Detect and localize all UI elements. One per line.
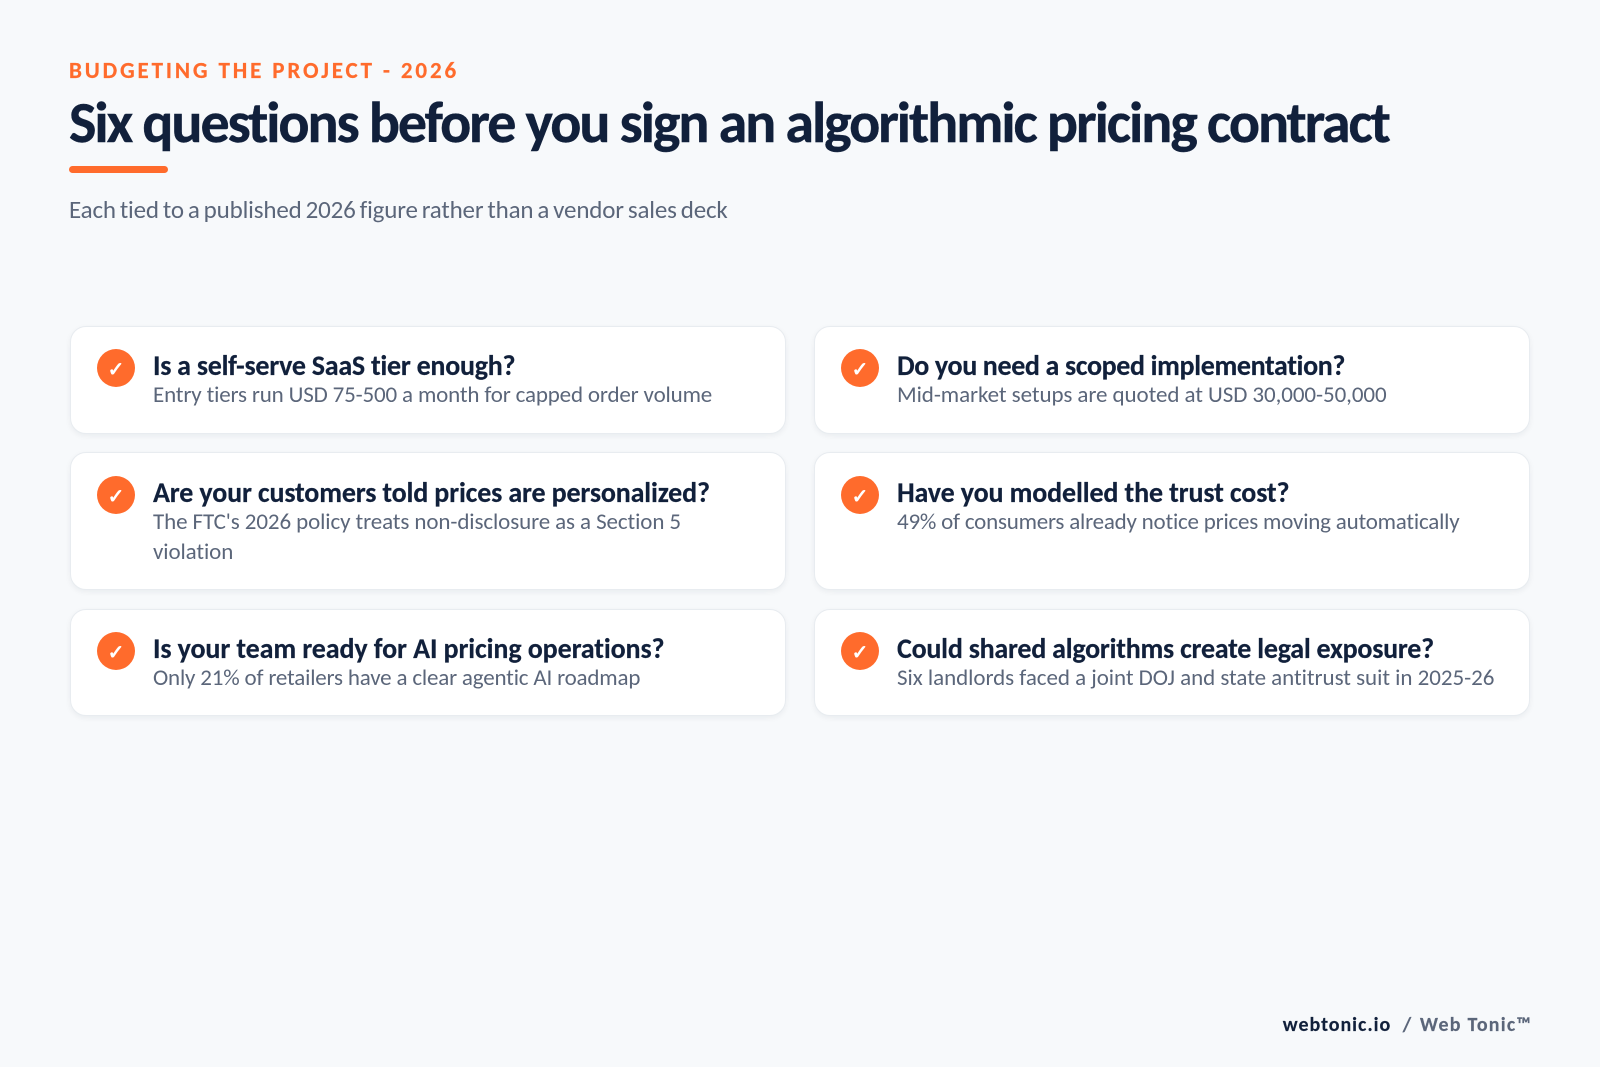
answer text: 49% of consumers already notice prices moving automatically [897,508,1459,536]
icon: check: ✓ [108,357,124,381]
question heading: Do you need a scoped implementation? [897,348,1345,383]
panel: self-serve SaaS tier [70,326,786,434]
icon: check [97,476,135,514]
answer text: The FTC's 2026 policy treats non-disclosure as a Section 5 [153,508,681,536]
icon: check: ✓ [108,484,124,508]
subtitle: Each tied to a published 2026 figure rather than a vendor sales deck [69,194,728,225]
question heading: Are your customers told prices are personalized? [153,475,710,510]
question heading: Is a self-serve SaaS tier enough? [153,348,515,383]
answer text [153,508,681,566]
icon: check [841,349,879,387]
answer text: Six landlords faced a joint DOJ and state antitrust suit in 2025-26 [897,664,1494,692]
icon: check [97,349,135,387]
answer text: Mid-market setups are quoted at USD 30,000-50,000 [897,381,1387,409]
answer text: Only 21% of retailers have a clear agentic AI roadmap [153,664,640,692]
question heading: Have you modelled the trust cost? [897,475,1289,510]
icon: check: ✓ [852,640,868,664]
eyebrow: BUDGETING THE PROJECT - 2026 [69,57,459,85]
title: Six questions before you sign an algorithmic pricing contract [69,87,1389,158]
icon: check: ✓ [852,357,868,381]
icon: check [97,632,135,670]
panel: personalized prices [70,452,786,590]
panel: legal exposure [814,609,1530,716]
question heading: Could shared algorithms create legal exposure? [897,631,1434,666]
answer text: violation [153,538,233,566]
panel: scoped implementation [814,326,1530,434]
footer brand: webtonic.io / Web Tonic™ [1283,1013,1532,1037]
panel: AI pricing operations [70,609,786,716]
question heading: Is your team ready for AI pricing operations? [153,631,664,666]
icon: check: ✓ [108,640,124,664]
panel: trust cost [814,452,1530,590]
icon: check [841,632,879,670]
icon: check [841,476,879,514]
icon: check: ✓ [852,484,868,508]
answer text: Entry tiers run USD 75-500 a month for capped order volume [153,381,712,409]
accent rule [69,166,168,173]
